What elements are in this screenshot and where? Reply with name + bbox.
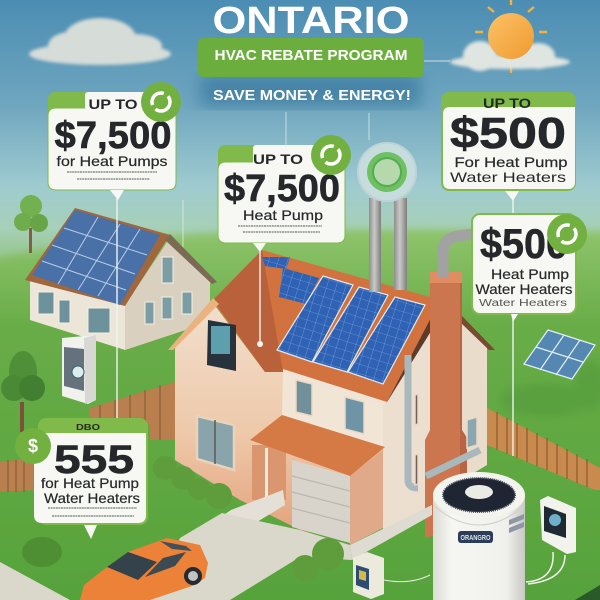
main house side walls: [350, 316, 495, 545]
callout: heat pumps left: [48, 82, 181, 345]
callout: water heaters upper right: For Heat Pump: [454, 154, 568, 170]
main roof: [168, 250, 438, 407]
green ground: [0, 230, 600, 600]
small house: [25, 208, 217, 350]
callout: heat pump center: Heat Pump: [243, 207, 323, 223]
dark corner: [575, 585, 600, 600]
callout: lower left water heaters: [15, 345, 148, 539]
main house front wall: [175, 303, 383, 540]
callout: lower left water heaters: $: [28, 436, 38, 456]
callout: water heaters right: $500: [480, 220, 568, 267]
left cloud: [29, 18, 171, 65]
sky background: [0, 0, 600, 300]
heat pump unit: ORANGRO: [460, 535, 491, 542]
chimney: [425, 272, 467, 538]
small yard solar panel: [524, 330, 595, 379]
garage: [292, 460, 350, 543]
callout: heat pump center: $7,500: [224, 168, 340, 210]
callout: lower left water heaters: for Heat Pump: [41, 475, 139, 491]
concrete slab: [350, 505, 432, 560]
callout: water heaters right: Water Heaters: [476, 281, 572, 297]
callout: water heaters upper right: Water Heaters: [450, 169, 566, 185]
subtitle banner: [198, 38, 424, 77]
tagline: SAVE MONEY & ENERGY!: [213, 87, 411, 104]
thermostat control: [526, 496, 576, 584]
callout: water heaters upper right: [441, 92, 576, 456]
right fence: [487, 408, 600, 490]
entry porch: [222, 445, 286, 525]
sun with cloud: [424, 0, 570, 73]
yard device: [353, 552, 430, 599]
callout: lower left water heaters: DBO: [76, 423, 100, 432]
driveway: [0, 513, 352, 600]
title: ONTARIO: [212, 0, 410, 42]
pipes with rebate ring: [358, 143, 416, 292]
cream upper wall: [282, 372, 383, 447]
yard shading: [500, 360, 600, 416]
house windows: [197, 380, 477, 485]
callout: heat pumps left: UP TO: [88, 96, 138, 112]
tree: lower left: [1, 351, 45, 432]
wall pipes: [408, 355, 480, 488]
chimney pipe: [443, 234, 473, 278]
title band shadow: [200, 75, 420, 107]
callout: heat pumps left: $7,500: [54, 115, 172, 157]
subtitle banner: HVAC REBATE PROGRAM: [214, 47, 408, 64]
callout: heat pump center: [218, 135, 351, 347]
thermostat on wall: [207, 320, 236, 371]
callout: lower left water heaters: 555: [54, 438, 134, 482]
callout: water heaters upper right: UP TO: [483, 95, 531, 111]
callout: water heaters right: Heat Pump: [491, 266, 569, 282]
callout: heat pumps left: for Heat Pumps: [56, 153, 168, 169]
callout: water heaters right: [472, 214, 587, 322]
tree: upper left: [14, 195, 48, 253]
air unit: [62, 335, 96, 404]
solar panels on main roof: [277, 276, 425, 384]
bushes: [22, 456, 344, 581]
callout: water heaters upper right: $500: [450, 109, 566, 158]
porch roof: [250, 415, 385, 476]
callout: water heaters right: Water Heaters: [479, 298, 567, 309]
car: [80, 538, 208, 600]
heat pump unit: [433, 472, 525, 600]
left fence: [0, 382, 175, 492]
connector lines: [183, 112, 369, 268]
callout: lower left water heaters: Water Heaters: [44, 490, 140, 506]
callout: heat pump center: UP TO: [253, 151, 303, 167]
